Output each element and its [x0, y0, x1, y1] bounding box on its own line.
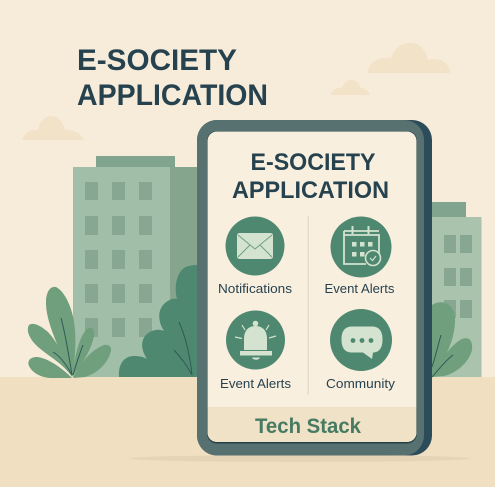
building: right — [425, 202, 482, 377]
plant: left — [28, 287, 111, 378]
icon: chat bubble — [330, 309, 392, 371]
main title — [77, 44, 268, 112]
label: notifications: Notifications — [218, 282, 292, 296]
divider — [308, 216, 309, 395]
cloud: top right — [368, 43, 450, 73]
cloud: left — [22, 116, 84, 140]
screen title: APPLICATION — [232, 177, 389, 204]
phone — [197, 120, 432, 456]
ground — [0, 377, 495, 487]
footer band: tech stack: Tech Stack — [255, 415, 361, 438]
screen title: E-SOCIETY — [250, 149, 376, 176]
plant: dark bush — [119, 265, 200, 377]
phone body — [197, 120, 432, 456]
label: community: Community — [326, 377, 396, 391]
footer band: tech stack — [208, 407, 416, 442]
main title: APPLICATION — [77, 79, 268, 112]
label: event alerts bottom: Event Alerts — [220, 377, 291, 391]
building: left — [73, 156, 200, 377]
main title: E-SOCIETY — [77, 44, 237, 77]
plant: right — [425, 302, 472, 378]
icon: envelope — [226, 216, 284, 276]
icon: bell — [226, 310, 285, 370]
screen title — [232, 149, 389, 204]
icon: calendar — [330, 216, 392, 278]
cloud: small — [331, 80, 370, 95]
phone screen — [207, 131, 417, 444]
label: event alerts top: Event Alerts — [324, 282, 394, 296]
phone shadow — [130, 455, 470, 462]
